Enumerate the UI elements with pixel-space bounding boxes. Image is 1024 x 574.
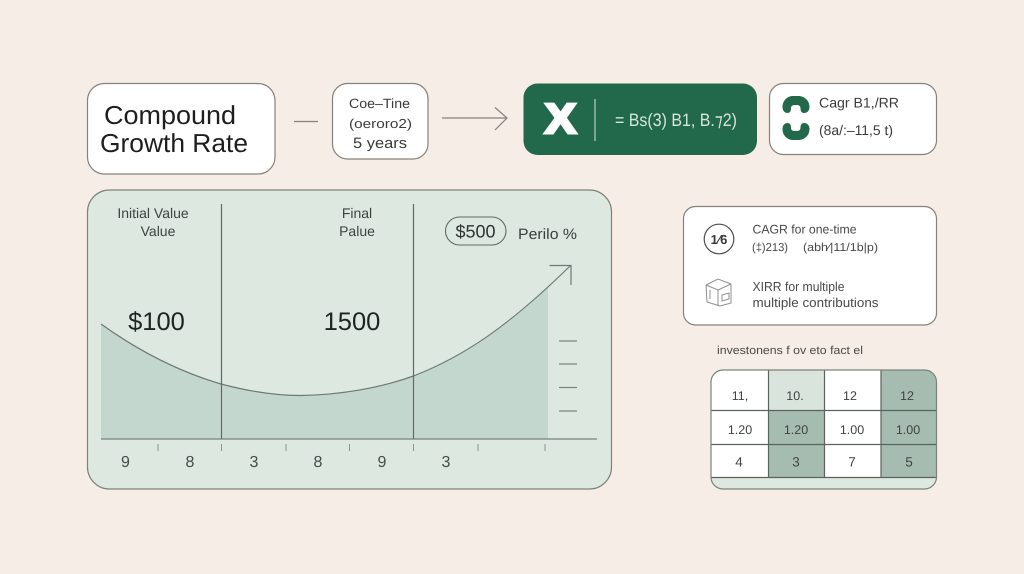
initial value label: Value (141, 223, 176, 239)
x axis labels: 8 (314, 454, 323, 471)
column dividers (222, 204, 414, 439)
icon: green brackets (782, 96, 810, 140)
text: CAGR note: (‡)213) (752, 242, 788, 254)
CAGR formula box (770, 84, 936, 154)
period box: 5 years (353, 135, 407, 152)
table values: 1.00 (840, 423, 864, 437)
table values (728, 389, 920, 470)
CAGR formula box: (8a/:–11,5 t) (819, 122, 893, 138)
period label: Perilo % (518, 226, 577, 243)
icon: boxes (706, 279, 731, 306)
table values: 12 (843, 389, 857, 403)
x axis labels: 3 (442, 454, 451, 471)
text: XIRR note (752, 279, 879, 310)
CAGR formula box: Cagr B1,/RR (819, 94, 899, 110)
table values: 11, (732, 389, 748, 403)
text: XIRR note: multiple contributions (752, 295, 879, 310)
final value label: Final (342, 205, 372, 221)
text: CAGR note: (abh⁄|11/1b|p) (803, 242, 878, 254)
x axis labels: 9 (378, 454, 387, 471)
table values: 10. (786, 389, 804, 403)
icon: excel X: X (545, 95, 576, 142)
icon: one-time circle: 1⁄6 (711, 232, 727, 247)
x axis labels: 9 (121, 454, 130, 471)
excel formula box: = Bs(3) B1, B.⁊2) (615, 110, 737, 130)
table cells (711, 370, 937, 490)
x axis labels: 8 (186, 454, 195, 471)
table values: 4 (735, 454, 743, 470)
text: CAGR note (752, 222, 878, 254)
table values: 5 (905, 454, 913, 470)
excel formula box (524, 84, 757, 155)
table values: 3 (792, 454, 800, 470)
table caption: investonens f ov eto fact el (717, 345, 863, 357)
text: XIRR note: XIRR for multiple (752, 279, 844, 294)
initial value label (117, 205, 189, 239)
table values: 12 (900, 389, 914, 403)
period box: (oeroro2) (349, 116, 412, 131)
x axis (101, 438, 597, 440)
panel: method notes (684, 206, 936, 325)
connector line (294, 120, 318, 122)
period box: Coe–Tine (349, 96, 410, 111)
area under curve (101, 287, 548, 439)
title box: Compound (104, 100, 236, 130)
x axis labels: 3 (250, 454, 259, 471)
initial value label: Initial Value (117, 205, 189, 221)
final value label (339, 205, 375, 239)
period box (332, 84, 428, 159)
right scale marks (559, 341, 577, 411)
text: CAGR note: CAGR for one-time (752, 222, 857, 236)
pill: $500: $500 (455, 222, 496, 242)
table values: 1.00 (896, 423, 920, 437)
table values: 7 (848, 454, 856, 470)
arrow (442, 108, 507, 130)
panel: growth chart (88, 190, 612, 489)
value: 1500: 1500 (324, 308, 380, 336)
title box (88, 84, 275, 174)
value: $100: $100 (128, 308, 185, 336)
icon: one-time circle (704, 224, 734, 254)
data table (711, 370, 937, 490)
table values: 1.20 (784, 423, 808, 437)
final value label: Palue (339, 223, 375, 239)
growth curve with arrow (101, 266, 571, 396)
pill: $500 (446, 217, 506, 245)
x axis ticks (158, 444, 545, 451)
table values: 1.20 (728, 423, 752, 437)
x axis labels (121, 454, 451, 471)
title box: Growth Rate (100, 128, 248, 158)
